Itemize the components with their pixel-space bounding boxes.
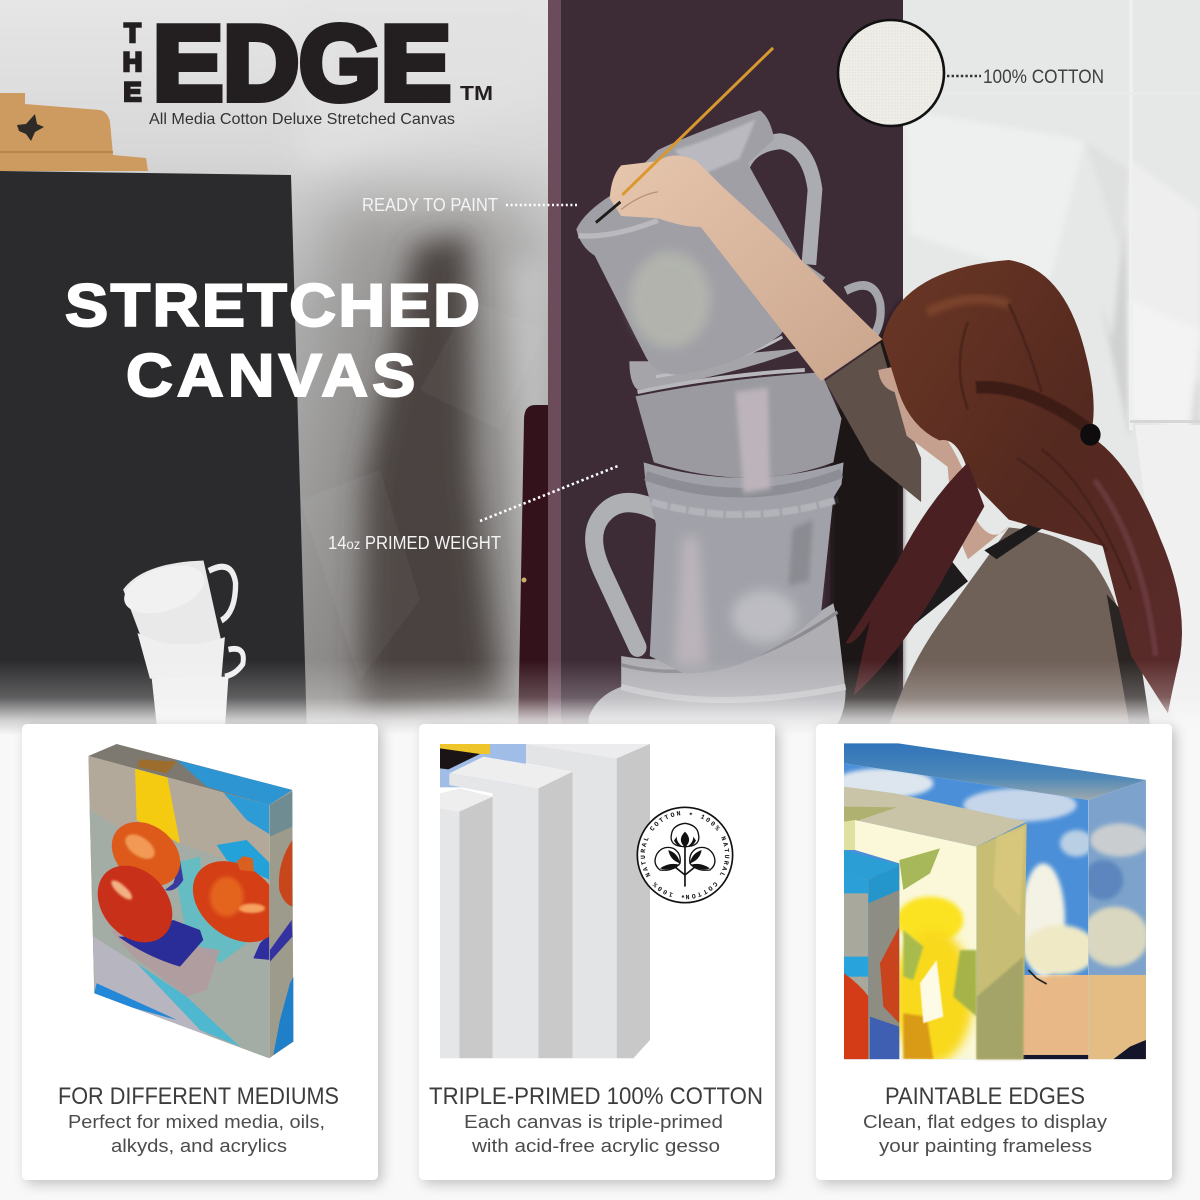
pomegranate back (112, 822, 180, 886)
wall right of the canvas (900, 0, 1200, 735)
logo: trademark: TM (460, 82, 493, 105)
description (464, 1112, 723, 1156)
callout: 100% cotton swatch (838, 20, 1104, 126)
panel: for different mediums (22, 724, 378, 1180)
pomegranate front (98, 866, 172, 942)
callout: ready to paint: READY TO PAINT (362, 195, 498, 215)
description: Each canvas is triple-primed (464, 1112, 723, 1132)
paintbrush (596, 49, 772, 223)
white teacups on left (120, 557, 243, 728)
logo: tagline: All Media Cotton Deluxe Stretched Canvas (149, 111, 455, 128)
bottom white fade (0, 660, 1200, 735)
wall shadow (306, 170, 548, 719)
canvas with pomegranates painting (82, 743, 296, 1060)
easel wood top (0, 93, 148, 171)
description (68, 1112, 325, 1156)
description: alkyds, and acrylics (111, 1136, 287, 1156)
nested painted canvases (833, 743, 1150, 1063)
callout: 100% cotton swatch: 100% COTTON (983, 67, 1104, 88)
logo: THE stacked: H (123, 47, 142, 77)
heading: Stretched Canvas: CANVAS (126, 342, 419, 409)
caption: FOR DIFFERENT MEDIUMS (58, 1083, 339, 1110)
painted teacup stack and artist (576, 49, 1182, 735)
logo: EDGE wordmark: EDGE (153, 4, 451, 122)
apron and tag (914, 525, 1042, 626)
black canvas on the easel (0, 171, 307, 735)
long red-brown hair (846, 260, 1182, 713)
panel: triple-primed cotton (417, 722, 785, 1190)
caption: TRIPLE-PRIMED 100% COTTON (429, 1083, 763, 1110)
logo: THE stacked: T (124, 18, 141, 48)
logo: THE stacked: E (123, 77, 142, 107)
raised arm and hand (610, 156, 882, 381)
heading: Stretched Canvas (65, 272, 482, 409)
description: your painting frameless (879, 1136, 1092, 1156)
logo: The Edge (123, 4, 493, 128)
caption: PAINTABLE EDGES (885, 1083, 1085, 1110)
face and neck (878, 366, 1009, 559)
description (863, 1112, 1107, 1156)
photo: studio scene (0, 0, 1200, 735)
painted cups (576, 110, 881, 735)
description: Clean, flat edges to display (863, 1112, 1107, 1132)
description: Perfect for mixed media, oils, (68, 1112, 325, 1132)
description: with acid-free acrylic gesso (471, 1136, 720, 1156)
cotton plant (655, 823, 715, 887)
badge lettering: ★ 100% NATURAL COTTON ★ 100% NATURAL COTTON (640, 810, 730, 900)
badge disc (637, 807, 733, 903)
panel: paintable edges (816, 724, 1172, 1180)
wall behind the easel (0, 0, 560, 735)
wooden easel frame (518, 405, 548, 735)
heading: Stretched Canvas: STRETCHED (65, 272, 482, 339)
pomegranate right (192, 856, 270, 942)
callout: 14oz primed weight: 14oz PRIMED WEIGHT (328, 533, 501, 553)
purple canvas (548, 0, 903, 735)
artist's sweater (825, 343, 1152, 735)
callout: 14oz primed weight (328, 466, 618, 553)
white primed canvases (440, 744, 733, 1058)
logo: THE stacked (123, 18, 142, 107)
